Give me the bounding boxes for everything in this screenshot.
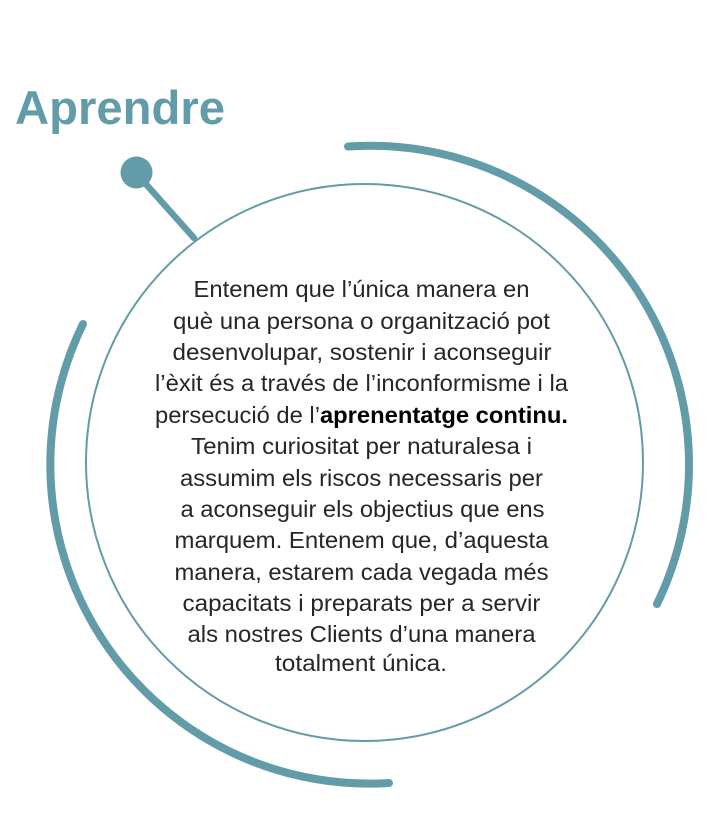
body text: què una persona o organització pot: [173, 308, 551, 334]
body text: totalment única.: [275, 650, 447, 676]
body text: capacitats i preparats per a servir: [182, 590, 541, 616]
body text: als nostres Clients d’una manera: [188, 621, 536, 647]
arc: outer right: [348, 146, 689, 604]
body text: l’èxit és a través de l’inconformisme i la: [155, 370, 568, 396]
arc: outer left: [50, 324, 389, 784]
body text: a aconseguir els objectius que ens: [180, 496, 544, 522]
body text: Entenem que l’única manera en: [194, 276, 530, 302]
icon: pin connector: [120, 156, 194, 238]
body text: Tenim curiositat per naturalesa i: [191, 433, 532, 459]
body text: desenvolupar, sostenir i aconseguir: [172, 339, 552, 365]
body text: manera, estarem cada vegada més: [174, 559, 548, 585]
inner circle: [86, 184, 643, 741]
title: Aprendre: [15, 81, 225, 134]
body text: assumim els riscos necessaris per: [180, 465, 543, 491]
body text: marquem. Entenem que, d’aquesta: [174, 527, 549, 553]
body text: [155, 276, 568, 676]
body text: persecució de l’aprenentatge continu.: [155, 402, 568, 428]
